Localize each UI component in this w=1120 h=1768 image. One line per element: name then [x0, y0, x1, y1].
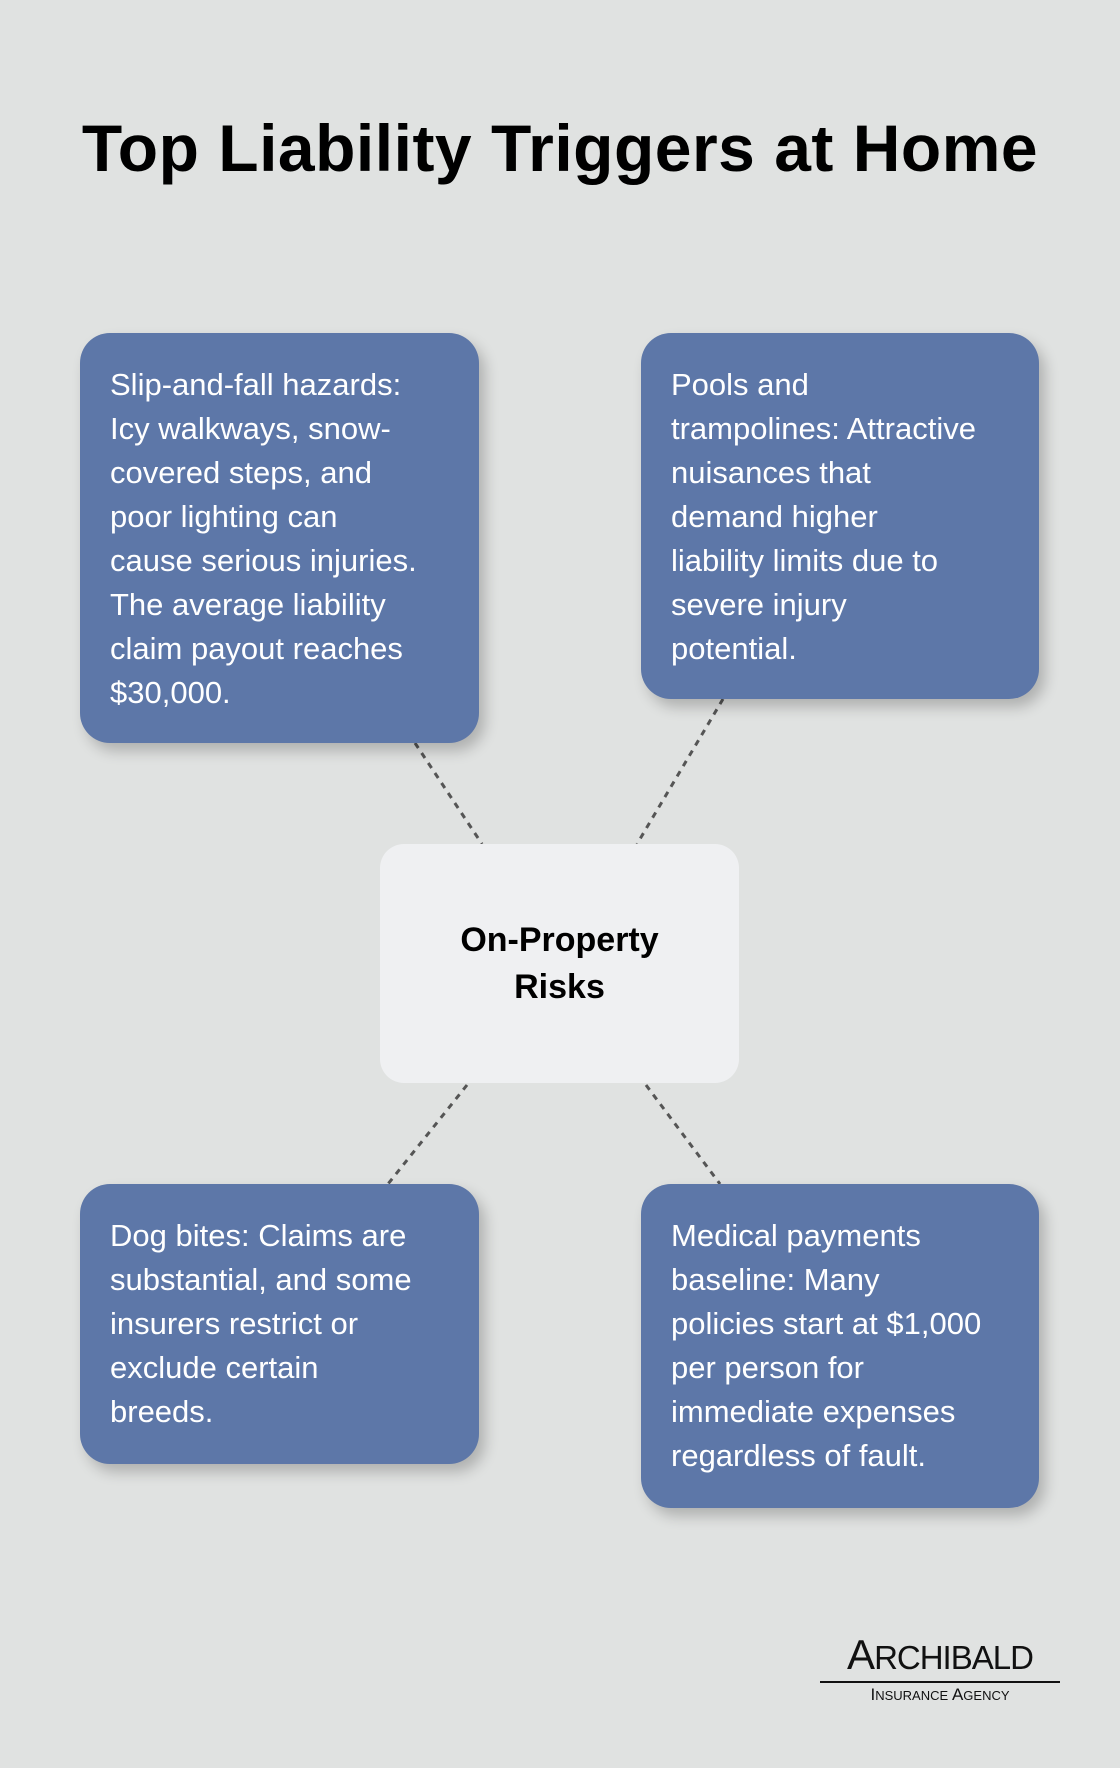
- panel: pools: potential.: [671, 631, 797, 666]
- panel: dog bites: breeds.: [110, 1394, 213, 1429]
- center node: [380, 844, 739, 1083]
- logo: ARCHIBALD: [847, 1631, 1033, 1678]
- panel: dog bites: insurers restrict or: [110, 1306, 358, 1341]
- panel: dog bites: substantial, and some: [110, 1262, 412, 1297]
- panel: dog bites: exclude certain: [110, 1350, 319, 1385]
- panel: medical payments: baseline: Many: [671, 1262, 880, 1297]
- logo: [820, 1631, 1060, 1704]
- panel: slip-and-fall: cause serious injuries.: [110, 543, 417, 578]
- panel: medical payments: [641, 1184, 1039, 1508]
- panel: slip-and-fall: covered steps, and: [110, 455, 372, 490]
- panel: pools: nuisances that: [671, 455, 871, 490]
- panel: dog bites: [80, 1184, 479, 1464]
- panel: medical payments: Medical payments: [671, 1218, 921, 1253]
- center node: On-Property: [460, 920, 659, 958]
- panel: medical payments: regardless of fault.: [671, 1438, 926, 1473]
- panel: slip-and-fall: $30,000.: [110, 675, 231, 710]
- panel: pools: Pools and: [671, 367, 809, 402]
- title: Top Liability Triggers at Home: [82, 111, 1038, 185]
- logo: INSURANCE AGENCY: [870, 1685, 1010, 1704]
- panel: slip-and-fall: Slip-and-fall hazards:: [110, 367, 401, 402]
- panel: pools: severe injury: [671, 587, 847, 622]
- panel: pools: demand higher: [671, 499, 878, 534]
- panel: dog bites: Dog bites: Claims are: [110, 1218, 406, 1253]
- panel: medical payments: per person for: [671, 1350, 864, 1385]
- panel: medical payments: policies start at $1,000: [671, 1306, 981, 1341]
- center node: Risks: [514, 968, 605, 1006]
- panel: slip-and-fall: poor lighting can: [110, 499, 338, 534]
- panel: pools: trampolines: Attractive: [671, 411, 976, 446]
- panel: pools: liability limits due to: [671, 543, 938, 578]
- panel: pools: [641, 333, 1039, 699]
- panel: medical payments: immediate expenses: [671, 1394, 955, 1429]
- panel: slip-and-fall: claim payout reaches: [110, 631, 403, 666]
- panel: slip-and-fall: The average liability: [110, 587, 386, 622]
- panel: slip-and-fall: [80, 333, 479, 743]
- panel: slip-and-fall: Icy walkways, snow-: [110, 411, 391, 446]
